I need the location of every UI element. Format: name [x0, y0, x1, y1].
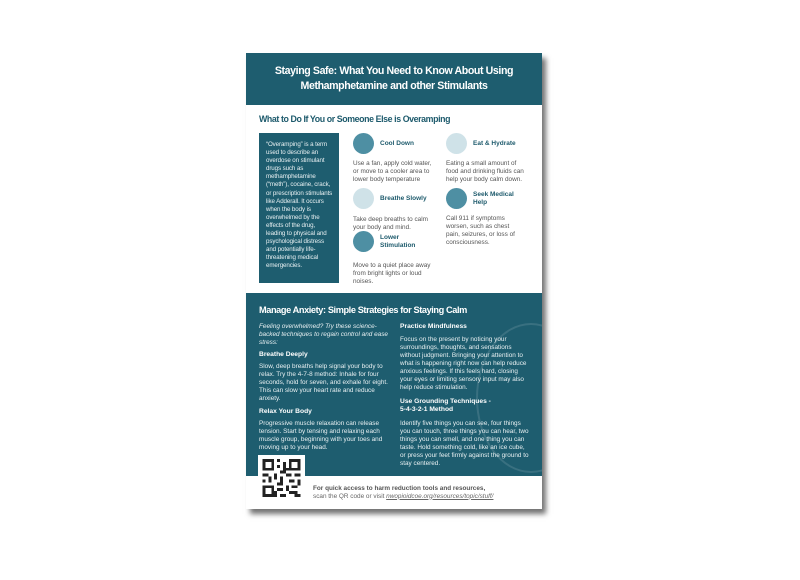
item: lower stimulation: Move to a quiet place away from bright lights or loud noises.	[353, 262, 430, 285]
item: lower stimulation: Lower	[380, 234, 399, 241]
icon: medical	[446, 188, 467, 209]
footer text: For quick access to harm reduction tools and resources,	[313, 485, 485, 492]
item: breathe slowly: Breathe Slowly	[380, 195, 427, 202]
left column: Progressive muscle relaxation can release tension. Start by tensing and relaxing each muscle group, beginning with your toes and moving up to your head.	[259, 420, 382, 451]
right column: Identify five things you can see, four things you can touch, three things you can hear, two things you can smell, and one thing you can taste. Hold something cold, like an ice cube, or press your feet firmly against the ground to stay centered.	[400, 420, 529, 467]
item: eat and hydrate	[446, 133, 524, 183]
left column: Feeling overwhelmed? Try these science-backed techniques to regain control and ease stress:	[259, 323, 388, 346]
heading: manage anxiety: Manage Anxiety: Simple Strategies for Staying Calm	[259, 305, 467, 315]
right column: 5-4-3-2-1 Method	[400, 406, 453, 413]
left column: Slow, deep breaths help signal your body to relax. Try the 4-7-8 method: Inhale for four seconds, hold for seven, and exhale for eight. This can slow your heart rate and reduce anxiety.	[259, 363, 388, 402]
item: lower stimulation	[353, 231, 430, 285]
left column	[259, 323, 388, 451]
left column: Breathe Deeply	[259, 351, 308, 358]
item: cool down: Cool Down	[380, 140, 414, 147]
item: breathe slowly	[353, 188, 428, 231]
section heading: overamping: What to Do If You or Someone Else is Overamping	[259, 114, 450, 124]
footer text	[313, 485, 494, 500]
item: eat and hydrate: Eat & Hydrate	[473, 140, 516, 147]
item: seek medical help: Help	[473, 199, 487, 206]
item: cool down	[353, 133, 432, 183]
item: lower stimulation: Stimulation	[380, 242, 415, 249]
icon: plate	[446, 133, 467, 154]
item: seek medical help: Seek Medical	[473, 191, 514, 198]
right column: Focus on the present by noticing your surroundings, thoughts, and sensations without judgment. Bringing your attention to what is happening right now can help reduce anxious feelings. If this feels hard, closing your eyes or limiting sensory input may also help reduce stimulation.	[400, 336, 526, 391]
icon: moon	[353, 231, 374, 252]
item: cool down: Use a fan, apply cold water, or move to a cooler area to lower body temperature	[353, 160, 432, 183]
item: eat and hydrate: Eating a small amount of food and drinking fluids can help your body calm down.	[446, 160, 524, 183]
icon: cool down	[353, 133, 374, 154]
decorative outline	[476, 323, 586, 473]
item: seek medical help	[446, 188, 515, 246]
left column: Relax Your Body	[259, 408, 312, 415]
definition box: “Overamping” is a term used to describe an overdose on stimulant drugs such as methamphetamine (“meth”), cocaine, crack, or prescription stimulants like Adderall. It occurs when the body is overwhelmed by the effects of the drug, leading to physical and psychological distress and potentially life-threatening medical emergencies.	[266, 141, 332, 269]
right column: Practice Mindfulness	[400, 323, 467, 330]
header banner: Methamphetamine and other Stimulants	[301, 80, 487, 92]
card	[246, 53, 542, 509]
icon: heart	[353, 188, 374, 209]
QR code	[258, 455, 305, 501]
item: seek medical help: Call 911 if symptoms worsen, such as chest pain, seizures, or loss of consciousness.	[446, 215, 515, 246]
header banner: Staying Safe: What You Need to Know About Using	[275, 65, 513, 77]
right column: Use Grounding Techniques -	[400, 398, 491, 405]
item: breathe slowly: Take deep breaths to calm your body and mind.	[353, 216, 428, 231]
panel: manage anxiety	[246, 293, 542, 476]
right column	[400, 323, 529, 467]
footer text: scan the QR code or visit nwopioidcoe.org/resources/topic/stuff/	[313, 493, 493, 500]
header banner	[246, 53, 542, 105]
